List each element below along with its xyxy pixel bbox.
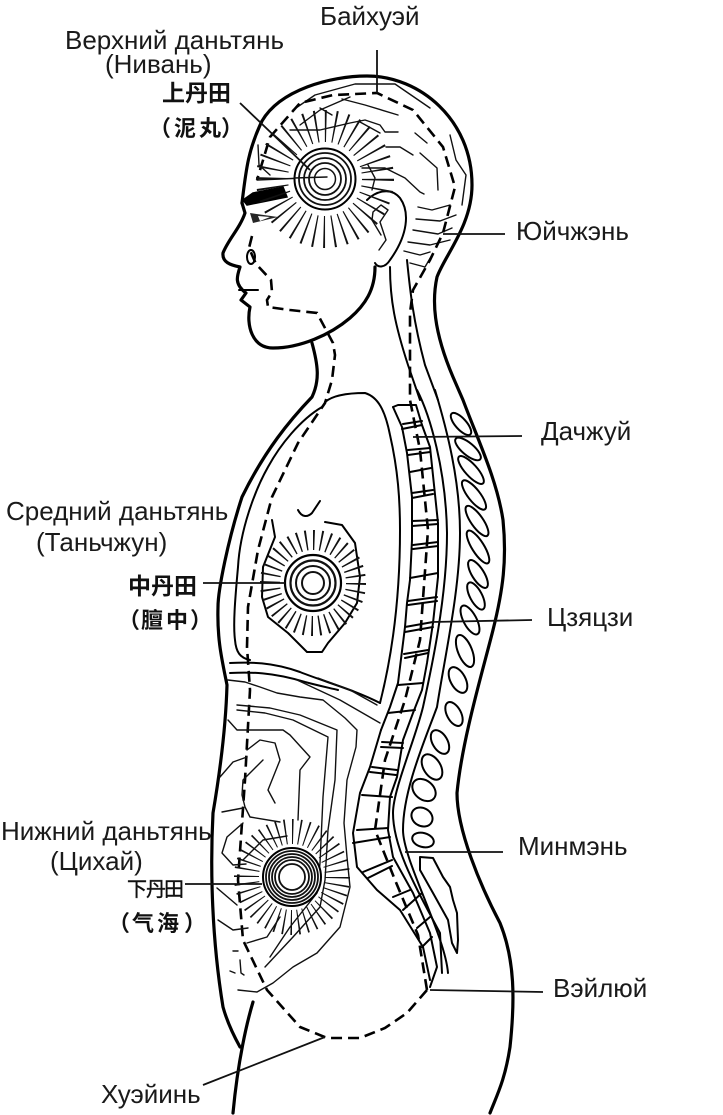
thigh front xyxy=(233,1002,253,1113)
label: upper dantian chinese: 上丹田 xyxy=(162,80,231,106)
spinal cord lines xyxy=(393,390,447,973)
rays xyxy=(270,540,356,626)
heart outline xyxy=(262,520,360,652)
neck wrinkles xyxy=(418,205,450,210)
label: Weilu: Вэйлюй xyxy=(553,973,647,1003)
brain wrinkles xyxy=(257,84,466,267)
neck inner lines xyxy=(390,267,420,400)
label: Jiaji: Цзяцзи xyxy=(547,602,633,632)
ear xyxy=(367,191,406,266)
rays xyxy=(272,126,378,232)
diaphragm and intestines xyxy=(217,678,380,992)
label: Huiyin: Хуэйинь xyxy=(101,1079,201,1109)
label: middle dantian: Средний даньтянь xyxy=(6,496,228,526)
body figure outline xyxy=(212,76,513,1113)
inner ear xyxy=(372,205,388,250)
governor channel along the spine xyxy=(257,93,455,990)
mouth xyxy=(239,289,258,291)
chest cavity and heart xyxy=(230,393,400,703)
label: Dazhui: Дачжуй xyxy=(541,416,631,446)
inner chest wall xyxy=(234,407,322,660)
label: middle dantian chinese: 中丹田 xyxy=(128,573,197,599)
label: Mingmen: Минмэнь xyxy=(518,831,628,861)
nose wing xyxy=(247,250,255,264)
upper dantian rings xyxy=(272,126,378,232)
rings xyxy=(285,555,341,611)
middle dantian rings xyxy=(270,540,356,626)
label: Niwan: (Нивань) xyxy=(105,49,212,79)
small mark above heart xyxy=(298,501,320,516)
face section of channel xyxy=(249,236,272,307)
eye xyxy=(250,213,278,223)
label: Baihui: Байхуэй xyxy=(320,1,420,31)
label: upper dantian: Верхний даньтянь xyxy=(65,25,284,55)
leader lines xyxy=(185,50,543,1085)
sacrum xyxy=(420,857,458,953)
front of neck and torso xyxy=(212,343,317,1047)
label: tanzhong chinese: （膻中） xyxy=(118,608,212,633)
front channel xyxy=(238,307,427,1038)
rings xyxy=(263,848,321,906)
label: niwan chinese: （泥丸） xyxy=(149,116,243,141)
rings xyxy=(294,148,356,210)
rays xyxy=(246,832,338,922)
spine vertebrae xyxy=(353,405,438,987)
eyebrow xyxy=(243,187,287,205)
label: Yuzhen: Юйчжэнь xyxy=(516,216,629,246)
lower dantian rings xyxy=(246,832,338,922)
label: qihai chinese: （气海） xyxy=(108,911,206,936)
spinous processes xyxy=(408,410,493,953)
diaphragm top lines xyxy=(230,663,380,703)
spine back edge xyxy=(388,405,438,987)
label: Qihai: (Цихай) xyxy=(50,846,143,876)
label: lower dantian chinese: 下丹田 xyxy=(127,879,184,901)
label: Tanzhong: (Таньчжун) xyxy=(36,527,167,557)
label: lower dantian: Нижний даньтянь xyxy=(1,816,212,846)
face profile and jaw xyxy=(223,203,375,348)
dashed meridian xyxy=(238,93,455,1038)
center line xyxy=(294,177,327,178)
lung cavity outline xyxy=(325,393,400,703)
spine front edge xyxy=(353,730,430,980)
head and back contour xyxy=(242,76,513,1113)
disc lines xyxy=(353,421,438,947)
